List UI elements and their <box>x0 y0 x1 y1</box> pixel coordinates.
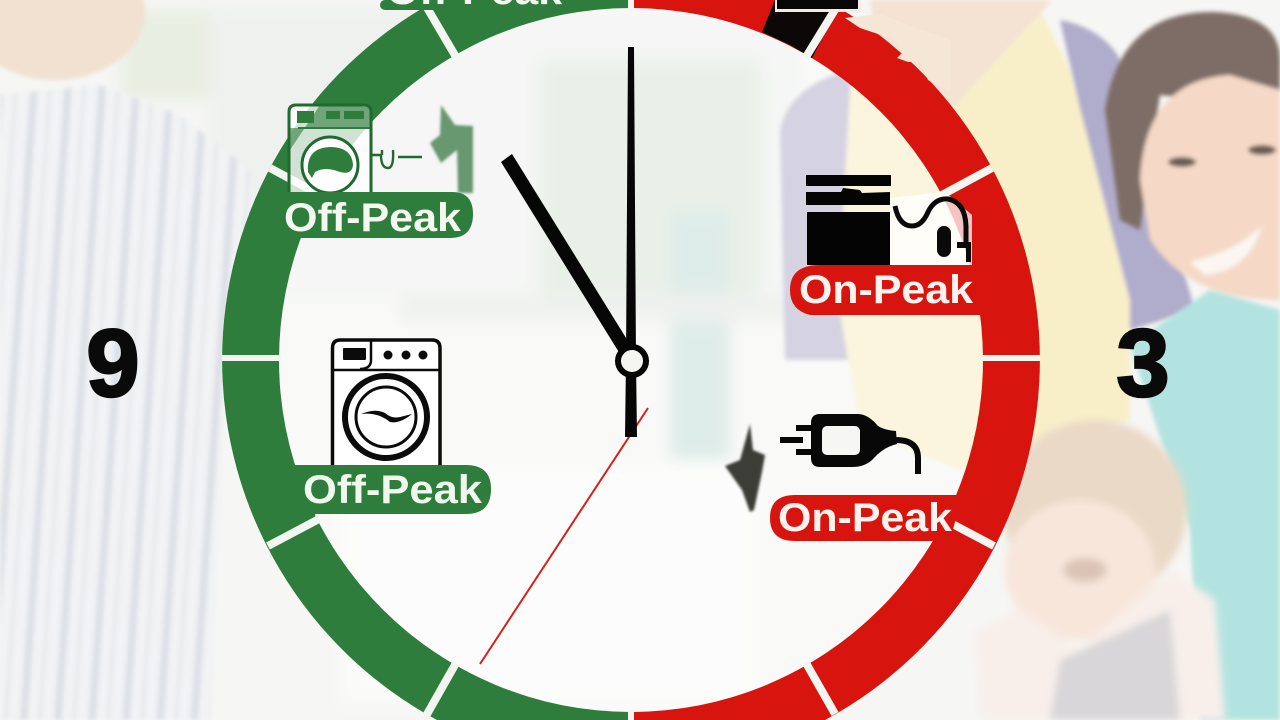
icon: black washing machine <box>332 340 440 466</box>
numeral 3: 3 <box>1116 310 1170 417</box>
appliance: washing machine with plug, off-peak <box>270 105 473 240</box>
appliance: washing machine, off-peak <box>290 340 491 525</box>
icon: electric plug <box>780 414 918 474</box>
icon: dark lightning bolt <box>725 424 765 512</box>
icon: faded green bolt <box>430 105 473 193</box>
label: on-peak pill lower: On-Peak <box>778 496 953 540</box>
background: laughing child <box>975 420 1225 720</box>
ring damage: torn red edge <box>845 14 950 90</box>
appliance: dishwasher with vacuum, on-peak <box>790 175 984 315</box>
clock face <box>279 8 983 712</box>
appliance: plug, on-peak <box>725 414 962 541</box>
hour hand <box>501 154 636 362</box>
icon: dishwasher <box>806 175 891 265</box>
second hand <box>480 408 648 664</box>
minute hand <box>625 47 637 437</box>
clock hands <box>480 47 648 664</box>
background: person in striped shirt <box>0 0 270 720</box>
icon: vacuum panel backing <box>890 192 972 265</box>
icon: washer cord <box>372 150 422 168</box>
icon: green washing machine <box>289 105 371 193</box>
background: man in yellow shirt <box>780 0 1195 470</box>
numeral 9: 9 <box>86 310 140 417</box>
label: off-peak pill upper: Off-Peak <box>284 196 462 240</box>
label: off-peak pill lower <box>290 465 491 525</box>
ring tick gaps <box>222 0 1040 720</box>
clock ring: coloured segments <box>222 0 1040 720</box>
label: on-peak pill upper: On-Peak <box>799 268 974 312</box>
clock face: pale lower area <box>340 465 760 705</box>
background: smiling woman <box>1105 12 1280 720</box>
ring segment: on-peak red half <box>631 0 1040 720</box>
label: off-peak pill lower: Off-Peak <box>303 468 483 512</box>
ring segment: off-peak green half <box>222 0 631 720</box>
icon: vacuum hose <box>895 199 971 262</box>
background: centre window <box>120 8 800 460</box>
centre hub <box>618 347 646 375</box>
ring segment: black section near 1 o'clock <box>762 0 842 58</box>
top black appliance fragment <box>775 0 861 12</box>
